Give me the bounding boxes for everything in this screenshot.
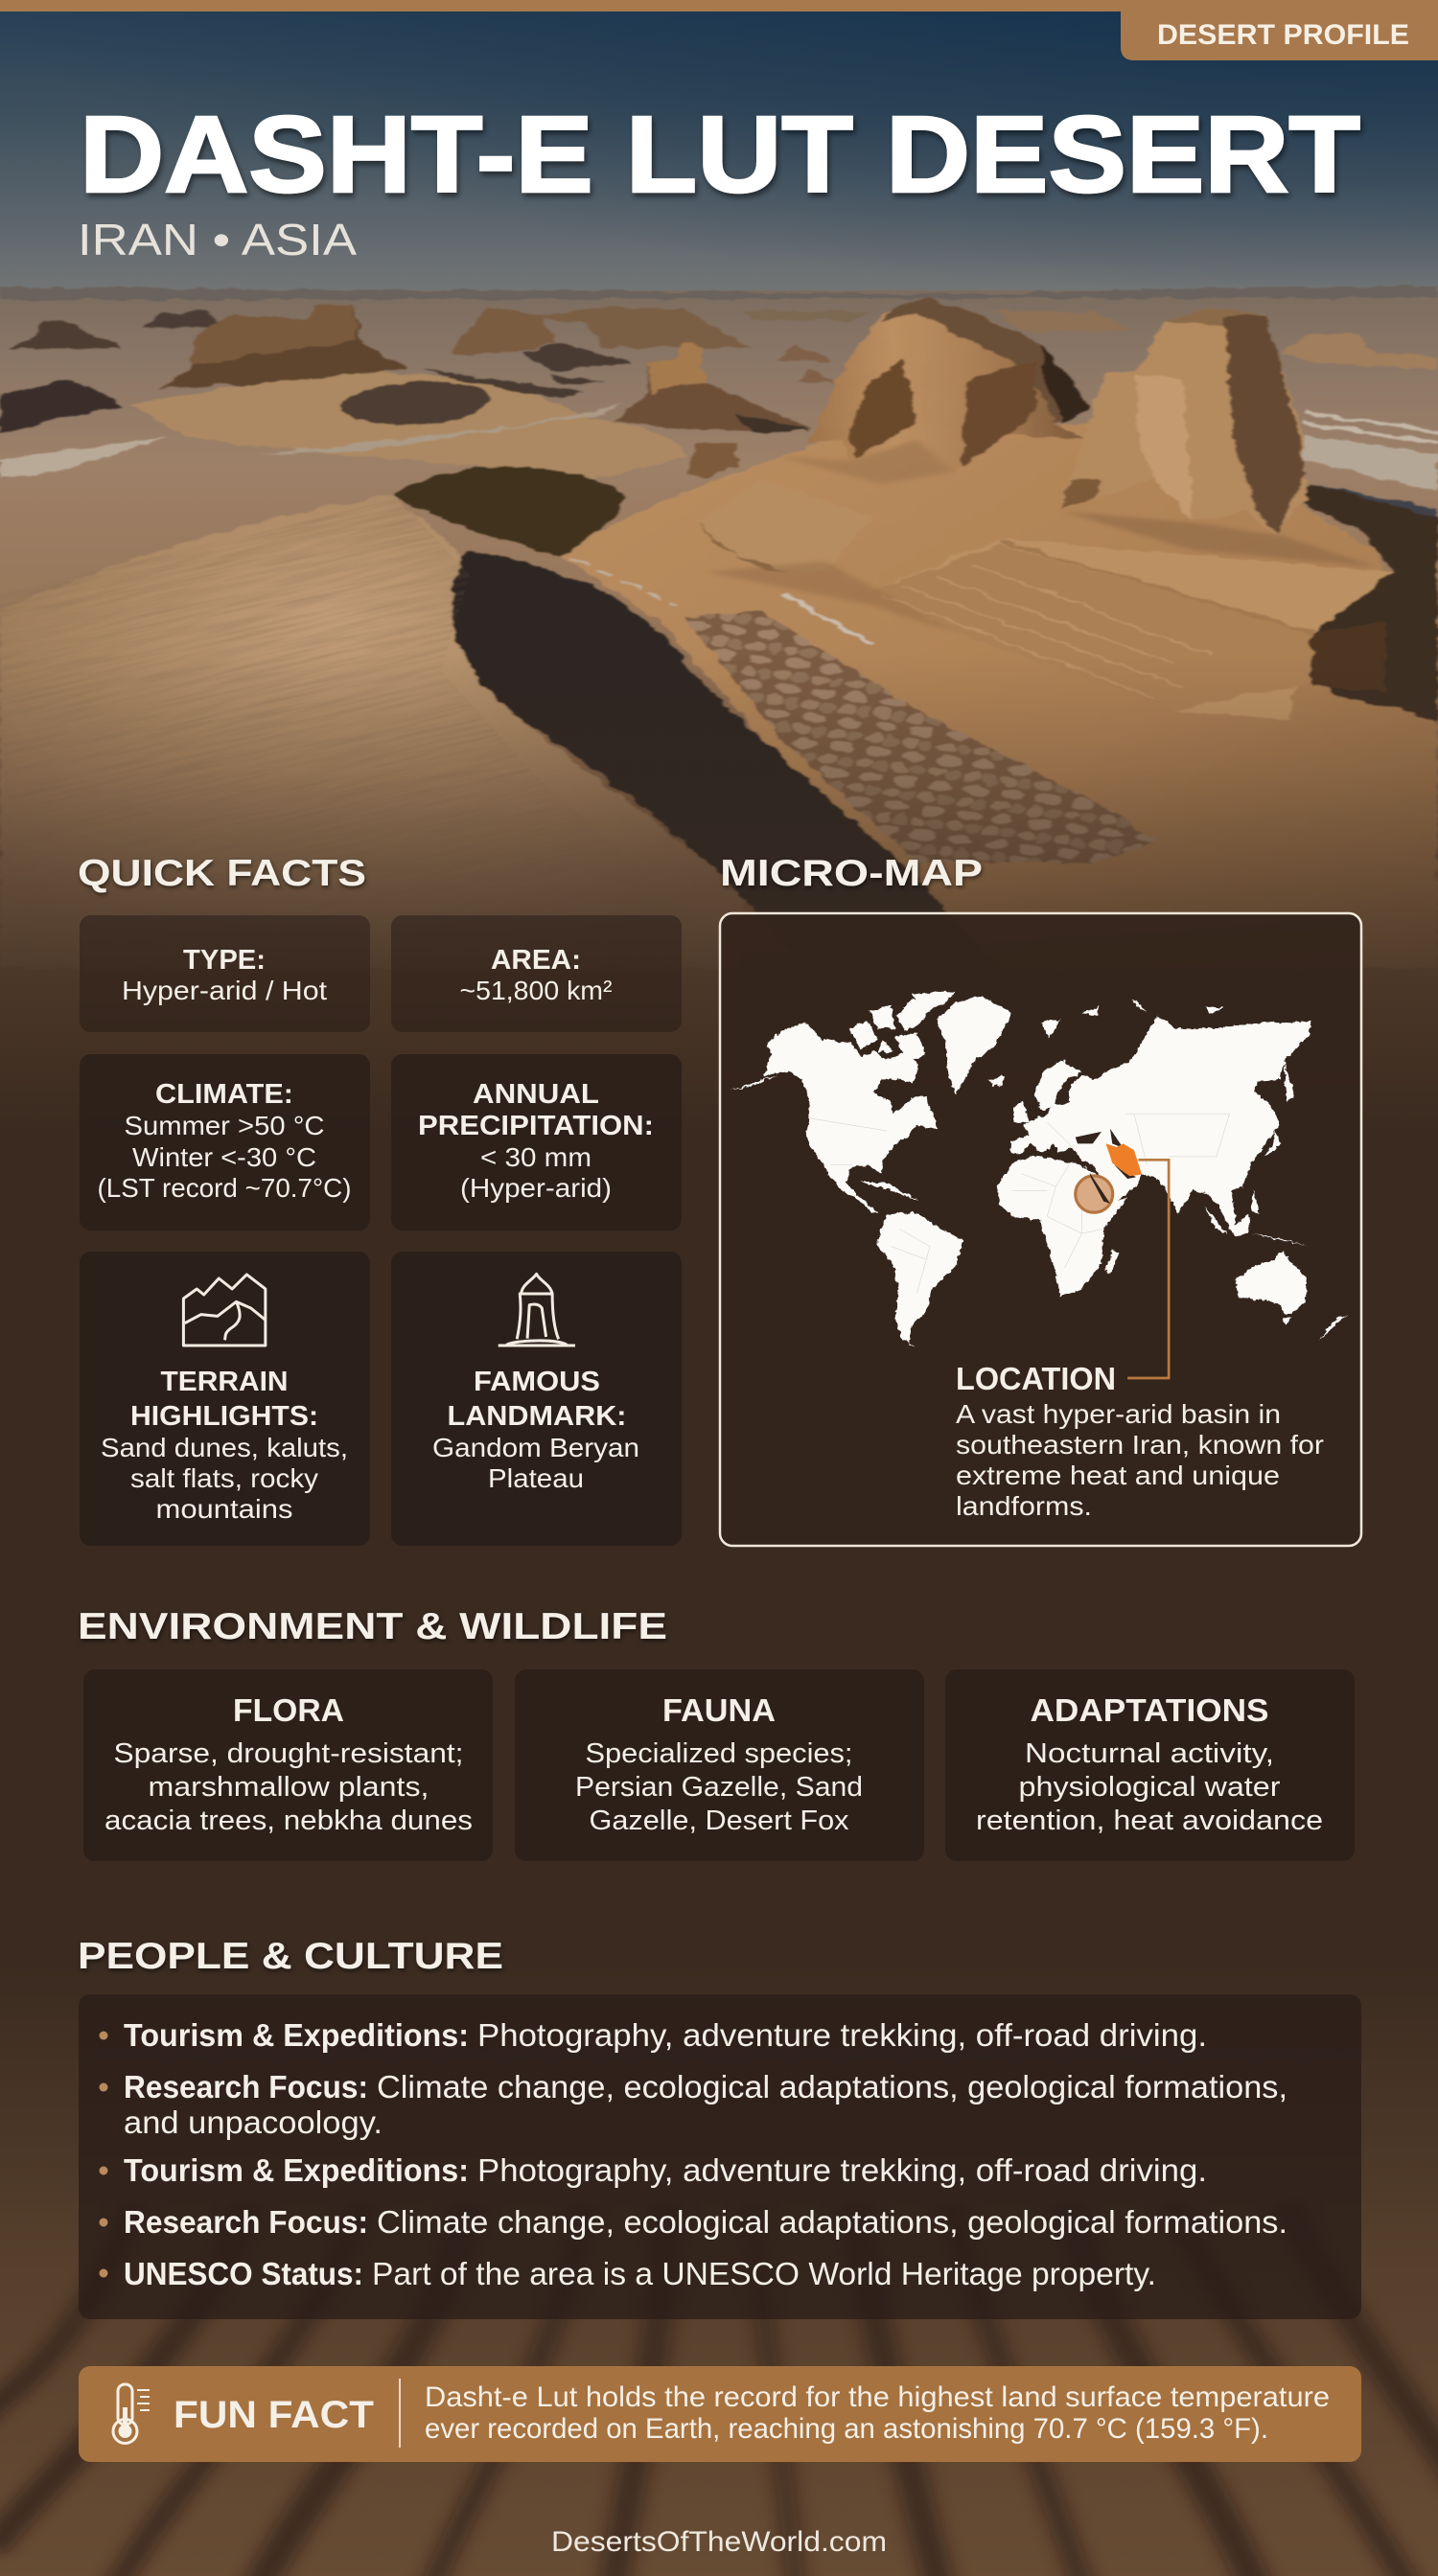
location text: landforms. <box>956 1491 1092 1521</box>
inland seas and gulfs <box>873 1079 1136 1179</box>
card: terrain highlights <box>80 1252 370 1546</box>
bullet list: Part of the area is a UNESCO World Heritage property. <box>372 2256 1156 2291</box>
card: fauna: FAUNA <box>662 1692 776 1728</box>
card: climate: (LST record ~70.7°C) <box>98 1173 351 1203</box>
card: famous landmark: LANDMARK: <box>447 1401 627 1432</box>
card: fauna <box>515 1669 924 1861</box>
bullet list <box>100 2017 1287 2291</box>
bullet list: Photography, adventure trekking, off-road driving. <box>477 2017 1207 2053</box>
location text: southeastern Iran, known for <box>956 1430 1324 1460</box>
card: climate: Winter <-30 °C <box>132 1142 316 1172</box>
heading: environment and wildlife: ENVIRONMENT & WILDLIFE <box>78 1606 667 1647</box>
card: fauna: Specialized species; <box>585 1738 853 1769</box>
card: adaptations: retention, heat avoidance <box>976 1806 1323 1836</box>
country borders <box>808 1114 1230 1294</box>
plateau block <box>871 540 1394 721</box>
card: flora: marshmallow plants, <box>148 1772 429 1803</box>
kaluts <box>807 297 1093 472</box>
bullet list: Photography, adventure trekking, off-road driving. <box>477 2152 1207 2188</box>
card: annual precipitation: < 30 mm <box>480 1142 591 1172</box>
location text: LOCATION <box>956 1361 1116 1396</box>
badge: desert profile: DESERT PROFILE <box>1157 19 1409 51</box>
dune crest shadow <box>394 467 625 557</box>
card: area: ~51,800 km² <box>460 976 612 1005</box>
icon: mountains terrain <box>183 1275 266 1346</box>
location text <box>956 1361 1324 1521</box>
subtitle: IRAN • ASIA <box>78 215 357 264</box>
card: annual precipitation: PRECIPITATION: <box>418 1111 654 1141</box>
icon: gandom beryan landmark <box>499 1274 575 1346</box>
card: type: Hyper-arid / Hot <box>122 976 327 1005</box>
badge: desert profile <box>1121 11 1438 60</box>
bottom sand stripes <box>0 2204 1438 2576</box>
bullet list: Tourism & Expeditions: <box>124 2152 469 2188</box>
card: terrain highlights: TERRAIN <box>161 1367 288 1397</box>
heading: people and culture: PEOPLE & CULTURE <box>78 1936 503 1977</box>
iran highlight <box>1105 1143 1142 1176</box>
callout: fun fact: ever recorded on Earth, reaching an astonishing 70.7 °C (159.3 °F). <box>425 2413 1268 2445</box>
card: annual precipitation: ANNUAL <box>473 1079 599 1110</box>
panel: environment and wildlife <box>78 1606 1355 1861</box>
landmasses <box>731 992 1347 1347</box>
main dune <box>0 495 743 968</box>
location text: A vast hyper-arid basin in <box>956 1399 1281 1429</box>
card: fauna: Persian Gazelle, Sand <box>575 1772 863 1803</box>
soft shading on rock faces <box>707 440 1376 632</box>
card: type <box>80 915 370 1032</box>
card: terrain highlights: Sand dunes, kaluts, <box>101 1433 348 1462</box>
card: flora: FLORA <box>233 1692 344 1728</box>
callout: fun fact: Dasht-e Lut holds the record for the highest land surface temperature <box>425 2381 1330 2413</box>
title: DASHT-E LUT DESERT <box>80 94 1360 215</box>
footer: DesertsOfTheWorld.com <box>551 2526 887 2558</box>
card: type: TYPE: <box>183 945 266 976</box>
bullet list: Research Focus: <box>124 2204 368 2240</box>
card: area <box>391 915 682 1032</box>
card: adaptations <box>945 1669 1355 1861</box>
desert landscape: kaluts and dunes <box>0 286 1438 968</box>
heading: quick facts: QUICK FACTS <box>78 853 366 894</box>
cracked ground <box>684 610 1155 862</box>
card: flora: acacia trees, nebkha dunes <box>104 1806 473 1836</box>
card: climate: CLIMATE: <box>155 1079 293 1110</box>
card: famous landmark: Gandom Beryan <box>432 1433 639 1462</box>
card: famous landmark: FAMOUS <box>474 1367 600 1397</box>
bullet list: Climate change, ecological adaptations, geological formations, <box>377 2069 1287 2104</box>
card: terrain highlights: HIGHLIGHTS: <box>130 1401 318 1432</box>
card: terrain highlights: salt flats, rocky <box>130 1463 318 1493</box>
card: adaptations: Nocturnal activity, <box>1025 1738 1274 1769</box>
callout: fun fact <box>79 2366 1361 2462</box>
card: annual precipitation: (Hyper-arid) <box>460 1173 612 1203</box>
card: flora <box>83 1669 493 1861</box>
top accent bar <box>0 0 1438 12</box>
bullet list: Tourism & Expeditions: <box>124 2017 469 2053</box>
bullet list: Research Focus: <box>124 2069 368 2104</box>
right rock mass <box>560 424 1438 968</box>
panel: micro-map <box>720 853 1361 1546</box>
fade overlay to dark brown <box>0 652 1438 2576</box>
card: annual precipitation <box>391 1054 682 1230</box>
card: flora: Sparse, drought-resistant; <box>113 1738 464 1769</box>
card: famous landmark: Plateau <box>488 1463 584 1493</box>
card: adaptations: physiological water <box>1018 1772 1281 1803</box>
map frame <box>720 913 1361 1546</box>
panel: people and culture <box>78 1936 1361 2319</box>
card: fauna: Gazelle, Desert Fox <box>589 1806 849 1836</box>
callout line <box>1127 1160 1169 1378</box>
heading: micro-map: MICRO-MAP <box>720 853 983 894</box>
card: famous landmark <box>391 1252 682 1546</box>
bullet list: Climate change, ecological adaptations, geological formations. <box>377 2204 1287 2240</box>
location text: extreme heat and unique <box>956 1460 1280 1490</box>
card: area: AREA: <box>491 945 581 976</box>
card: adaptations: ADAPTATIONS <box>1030 1692 1269 1728</box>
icon: thermometer <box>113 2384 150 2444</box>
card: terrain highlights: mountains <box>155 1494 293 1524</box>
card: climate: Summer >50 °C <box>125 1111 324 1140</box>
sand ripples on main dune <box>36 508 492 767</box>
bullet list: UNESCO Status: <box>124 2256 363 2291</box>
world map <box>731 992 1347 1378</box>
panel: quick facts <box>78 853 682 1546</box>
callout: fun fact: FUN FACT <box>174 2394 374 2436</box>
bullet list: and unpacoology. <box>124 2104 383 2140</box>
card: climate <box>80 1054 370 1230</box>
culture list background <box>79 1994 1361 2319</box>
marker: highlighted circle <box>1076 1176 1113 1212</box>
sky <box>0 0 1438 297</box>
